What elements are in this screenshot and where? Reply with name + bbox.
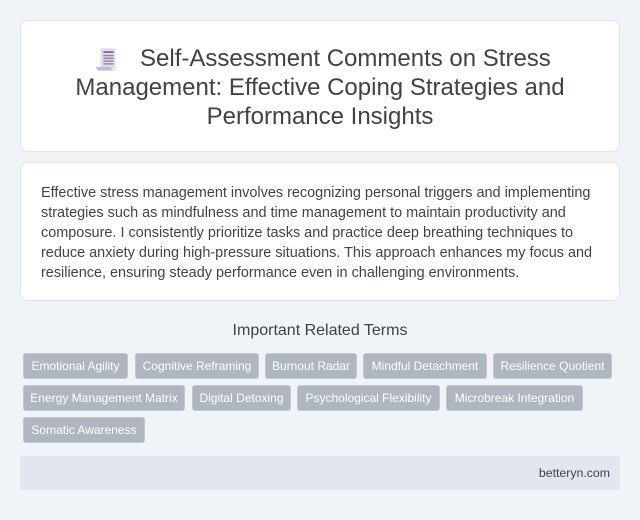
text block: description [41,185,592,281]
tag [192,385,291,411]
tag [23,417,145,443]
panel: description [20,162,620,301]
icon: paper scroll [96,48,117,71]
tag: Digital Detoxing [199,391,284,405]
tag [23,353,128,379]
tag: Somatic Awareness [31,423,137,437]
tag: Burnout Radar [272,359,350,373]
text block: description: reduce anxiety during high-pressure situations. This approach enhances my focus and [41,245,592,261]
tag: Psychological Flexibility [305,391,432,405]
title: Management: Effective Coping Strategies and [75,74,565,101]
tag: Mindful Detachment [372,359,478,373]
tag: Microbreak Integration [455,391,574,405]
text block: description: strategies such as mindfulness and time management to maintain productivity and [41,205,566,221]
text block: description: composure. I consistently prioritize tasks and practice deep breathing techniques to [41,225,573,241]
tag: Resilience Quotient [500,359,605,373]
footer bar [20,456,620,490]
tag [23,385,185,411]
tag [265,353,357,379]
tag [363,353,487,379]
text block: description: Effective stress management involves recognizing personal triggers and implementing [41,185,590,201]
tag group: related terms [23,353,612,443]
tag [446,385,583,411]
title: Self-Assessment Comments on Stress [140,45,551,72]
title [75,45,565,130]
tag [493,353,612,379]
tag [297,385,440,411]
tag [135,353,259,379]
tag: Emotional Agility [31,359,120,373]
text block: description: resilience, ensuring steady performance even in challenging environments. [41,265,519,281]
tag: Cognitive Reframing [143,359,251,373]
tag: Energy Management Matrix [30,391,178,405]
title: Performance Insights [207,103,433,130]
footer source text: betteryn.com [539,466,610,480]
heading: related terms: Important Related Terms [233,322,407,339]
panel: title card [20,20,620,152]
